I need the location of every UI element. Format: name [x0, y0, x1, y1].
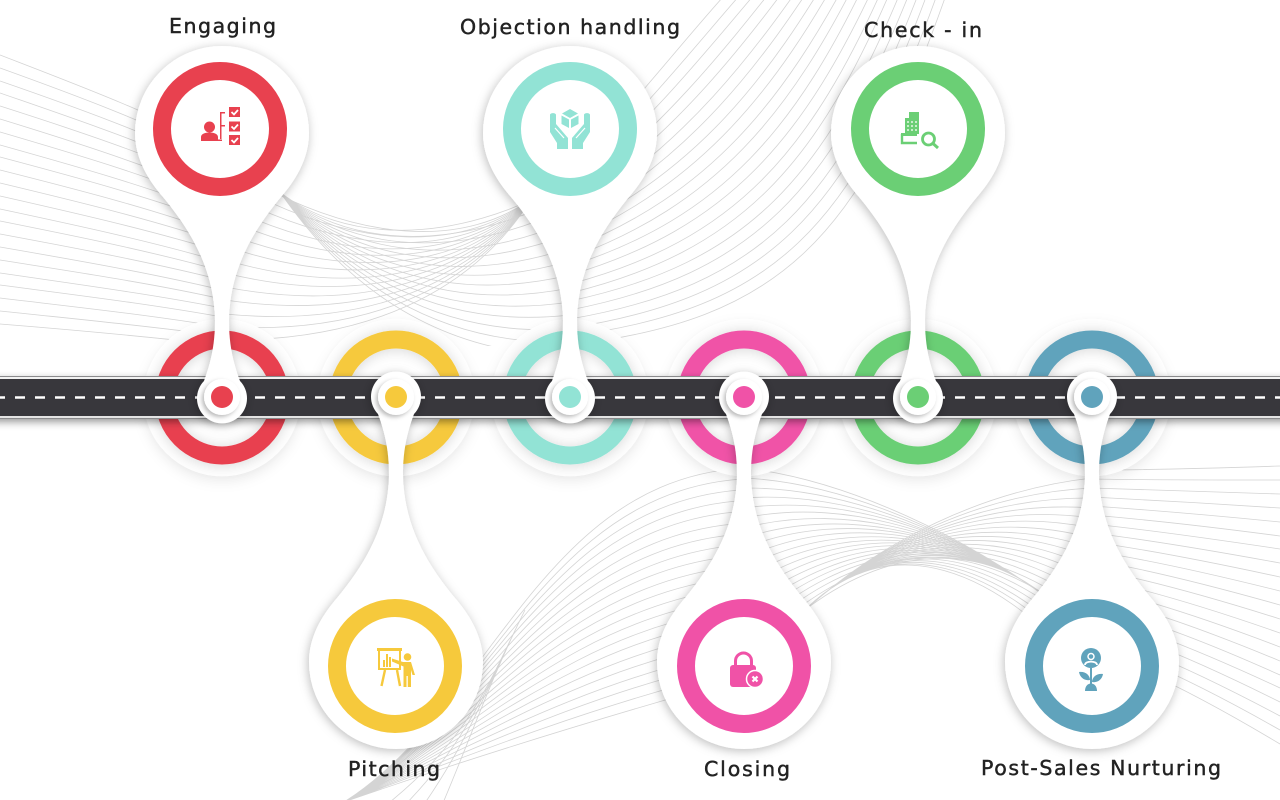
icon: hands holding box [550, 109, 590, 149]
head ring: pitching [337, 608, 453, 724]
heading: Pitching: Pitching [348, 757, 440, 781]
icon: presenter at board [377, 648, 415, 687]
road ring: closing [666, 320, 822, 476]
heading: Objection handling: Objection handling [460, 15, 680, 39]
icon: building with magnifier [901, 112, 938, 148]
background line mesh: top right [570, 0, 946, 345]
icon: person on plant [1079, 648, 1103, 691]
node dot: engaging [204, 379, 240, 415]
background line mesh: bottom right [1092, 466, 1280, 744]
road ring: check-in [840, 320, 996, 476]
pin: check-in [831, 46, 1005, 423]
heading: Check - in: Check - in [864, 18, 982, 42]
icon: lock with x [730, 653, 764, 688]
heading: Post-Sales Nurturing: Post-Sales Nurturing [981, 756, 1221, 780]
road ring: objection handling [492, 320, 648, 476]
node dot: check-in [900, 379, 936, 415]
icon: person with checklist [201, 107, 240, 145]
heading: Closing: Closing [704, 757, 790, 781]
background line mesh: bottom centre arch [744, 468, 1092, 678]
road ring: post-sales [1014, 320, 1170, 476]
background line mesh: top left [0, 55, 570, 356]
background line mesh: bottom left [344, 468, 744, 800]
pin: engaging [135, 46, 309, 423]
road ring: engaging [144, 320, 300, 476]
head ring: post-sales nurturing [1034, 608, 1150, 724]
pin: post-sales nurturing [1005, 372, 1179, 749]
pin: pitching [309, 372, 483, 749]
road [0, 376, 1280, 419]
head ring: engaging [162, 71, 278, 187]
heading: Engaging: Engaging [169, 14, 276, 38]
node dot: closing [726, 379, 762, 415]
head ring: closing [686, 608, 802, 724]
node dot: objection handling [552, 379, 588, 415]
head ring: check-in [860, 71, 976, 187]
head ring: objection handling [512, 71, 628, 187]
pin: closing [657, 372, 831, 749]
road rings group [144, 320, 1170, 476]
node dot: pitching [378, 379, 414, 415]
pin: objection handling [483, 46, 657, 423]
road ring: pitching [318, 320, 474, 476]
node dot: post-sales [1074, 379, 1110, 415]
